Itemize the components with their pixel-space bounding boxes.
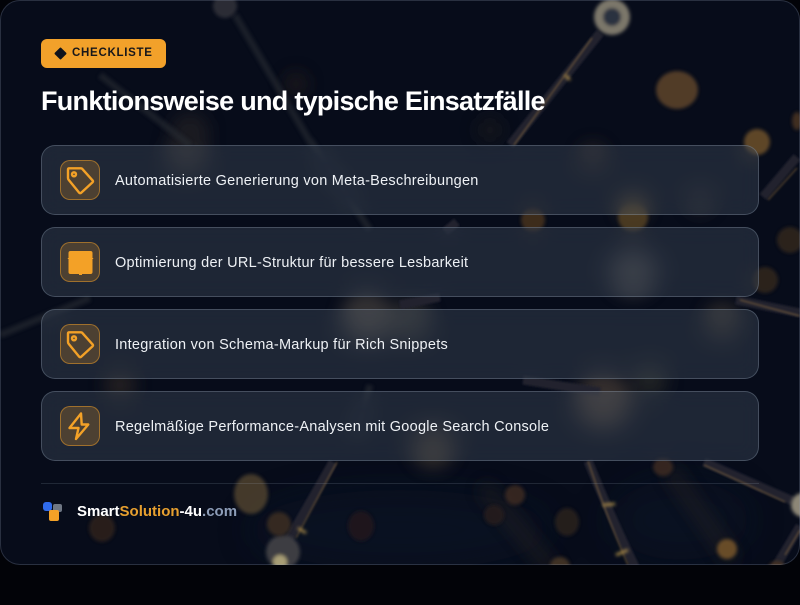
list item: Schema-Markup bbox=[41, 309, 759, 379]
glass strands bbox=[286, 33, 800, 573]
text: Automatisierte Generierung von Meta-Beschreibungen bbox=[115, 172, 479, 188]
icon: filled square bbox=[60, 242, 100, 282]
icon: tag bbox=[60, 160, 100, 200]
title: Funktionsweise und typische Einsatzfälle bbox=[41, 86, 545, 116]
text: Integration von Schema-Markup für Rich Snippets bbox=[115, 336, 448, 352]
brand name: SmartSolution-4u.com bbox=[77, 503, 237, 520]
glass nodes bbox=[213, 0, 800, 569]
text: Optimierung der URL-Struktur für bessere Lesbarkeit bbox=[115, 254, 468, 270]
badge: Checkliste bbox=[41, 39, 166, 68]
soft patches behind cards bbox=[104, 72, 740, 469]
faint blurred strands bbox=[483, 469, 733, 572]
icon: lightning bolt bbox=[60, 406, 100, 446]
badge: Checkliste: CHECKLISTE bbox=[72, 47, 153, 59]
text: Regelmäßige Performance-Analysen mit Google Search Console bbox=[115, 418, 549, 434]
logo mark bbox=[43, 502, 62, 521]
icon: tag bbox=[60, 324, 100, 364]
bokeh bbox=[89, 71, 800, 579]
list item: Meta-Beschreibungen bbox=[41, 145, 759, 215]
list item: Performance-Analysen bbox=[41, 391, 759, 461]
list item: URL-Struktur bbox=[41, 227, 759, 297]
